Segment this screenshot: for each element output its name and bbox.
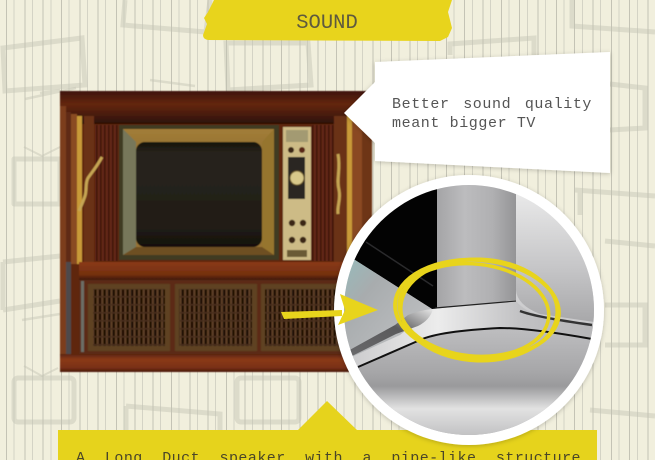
shelf	[79, 262, 352, 280]
rounded foot	[350, 309, 432, 356]
speaker grille 1	[88, 284, 170, 351]
light backdrop right of column	[516, 206, 594, 322]
close-up of TV stand	[344, 185, 594, 435]
ornament left	[79, 157, 102, 211]
speaker section	[79, 280, 352, 354]
column	[437, 185, 516, 309]
speaker grille 3	[261, 284, 346, 351]
vertical grooves left	[95, 125, 118, 261]
callout paper	[344, 52, 610, 173]
cabinet body	[60, 91, 372, 372]
yellow arrow	[281, 294, 378, 325]
picture frame	[119, 125, 279, 260]
white circle frame	[334, 175, 604, 445]
table surface	[358, 329, 590, 435]
top moulding	[60, 91, 372, 124]
callout text: Better sound quality	[392, 96, 592, 113]
caption panel with pointer	[58, 401, 597, 460]
heading: SOUND: SOUND	[296, 12, 358, 35]
magnified circle: long duct speaker	[330, 175, 604, 445]
callout: better sound quality	[344, 52, 610, 173]
yellow caption box	[58, 401, 597, 460]
callout text: meant bigger TV	[392, 115, 536, 132]
speaker grille 2	[175, 284, 257, 351]
silver base band	[353, 302, 593, 366]
vertical grooves right	[312, 125, 334, 261]
black screen	[354, 189, 437, 309]
old wooden console television	[60, 91, 372, 372]
grey wedge of the base	[344, 260, 432, 362]
control panel	[283, 127, 311, 260]
screen	[136, 142, 262, 247]
hand-drawn yellow circle	[392, 254, 562, 364]
bottom rail	[60, 354, 372, 372]
heading banner	[203, 0, 452, 41]
banner brush shape	[203, 0, 452, 41]
left columns	[60, 106, 94, 368]
right columns	[334, 116, 372, 372]
gold bezel	[123, 129, 274, 255]
